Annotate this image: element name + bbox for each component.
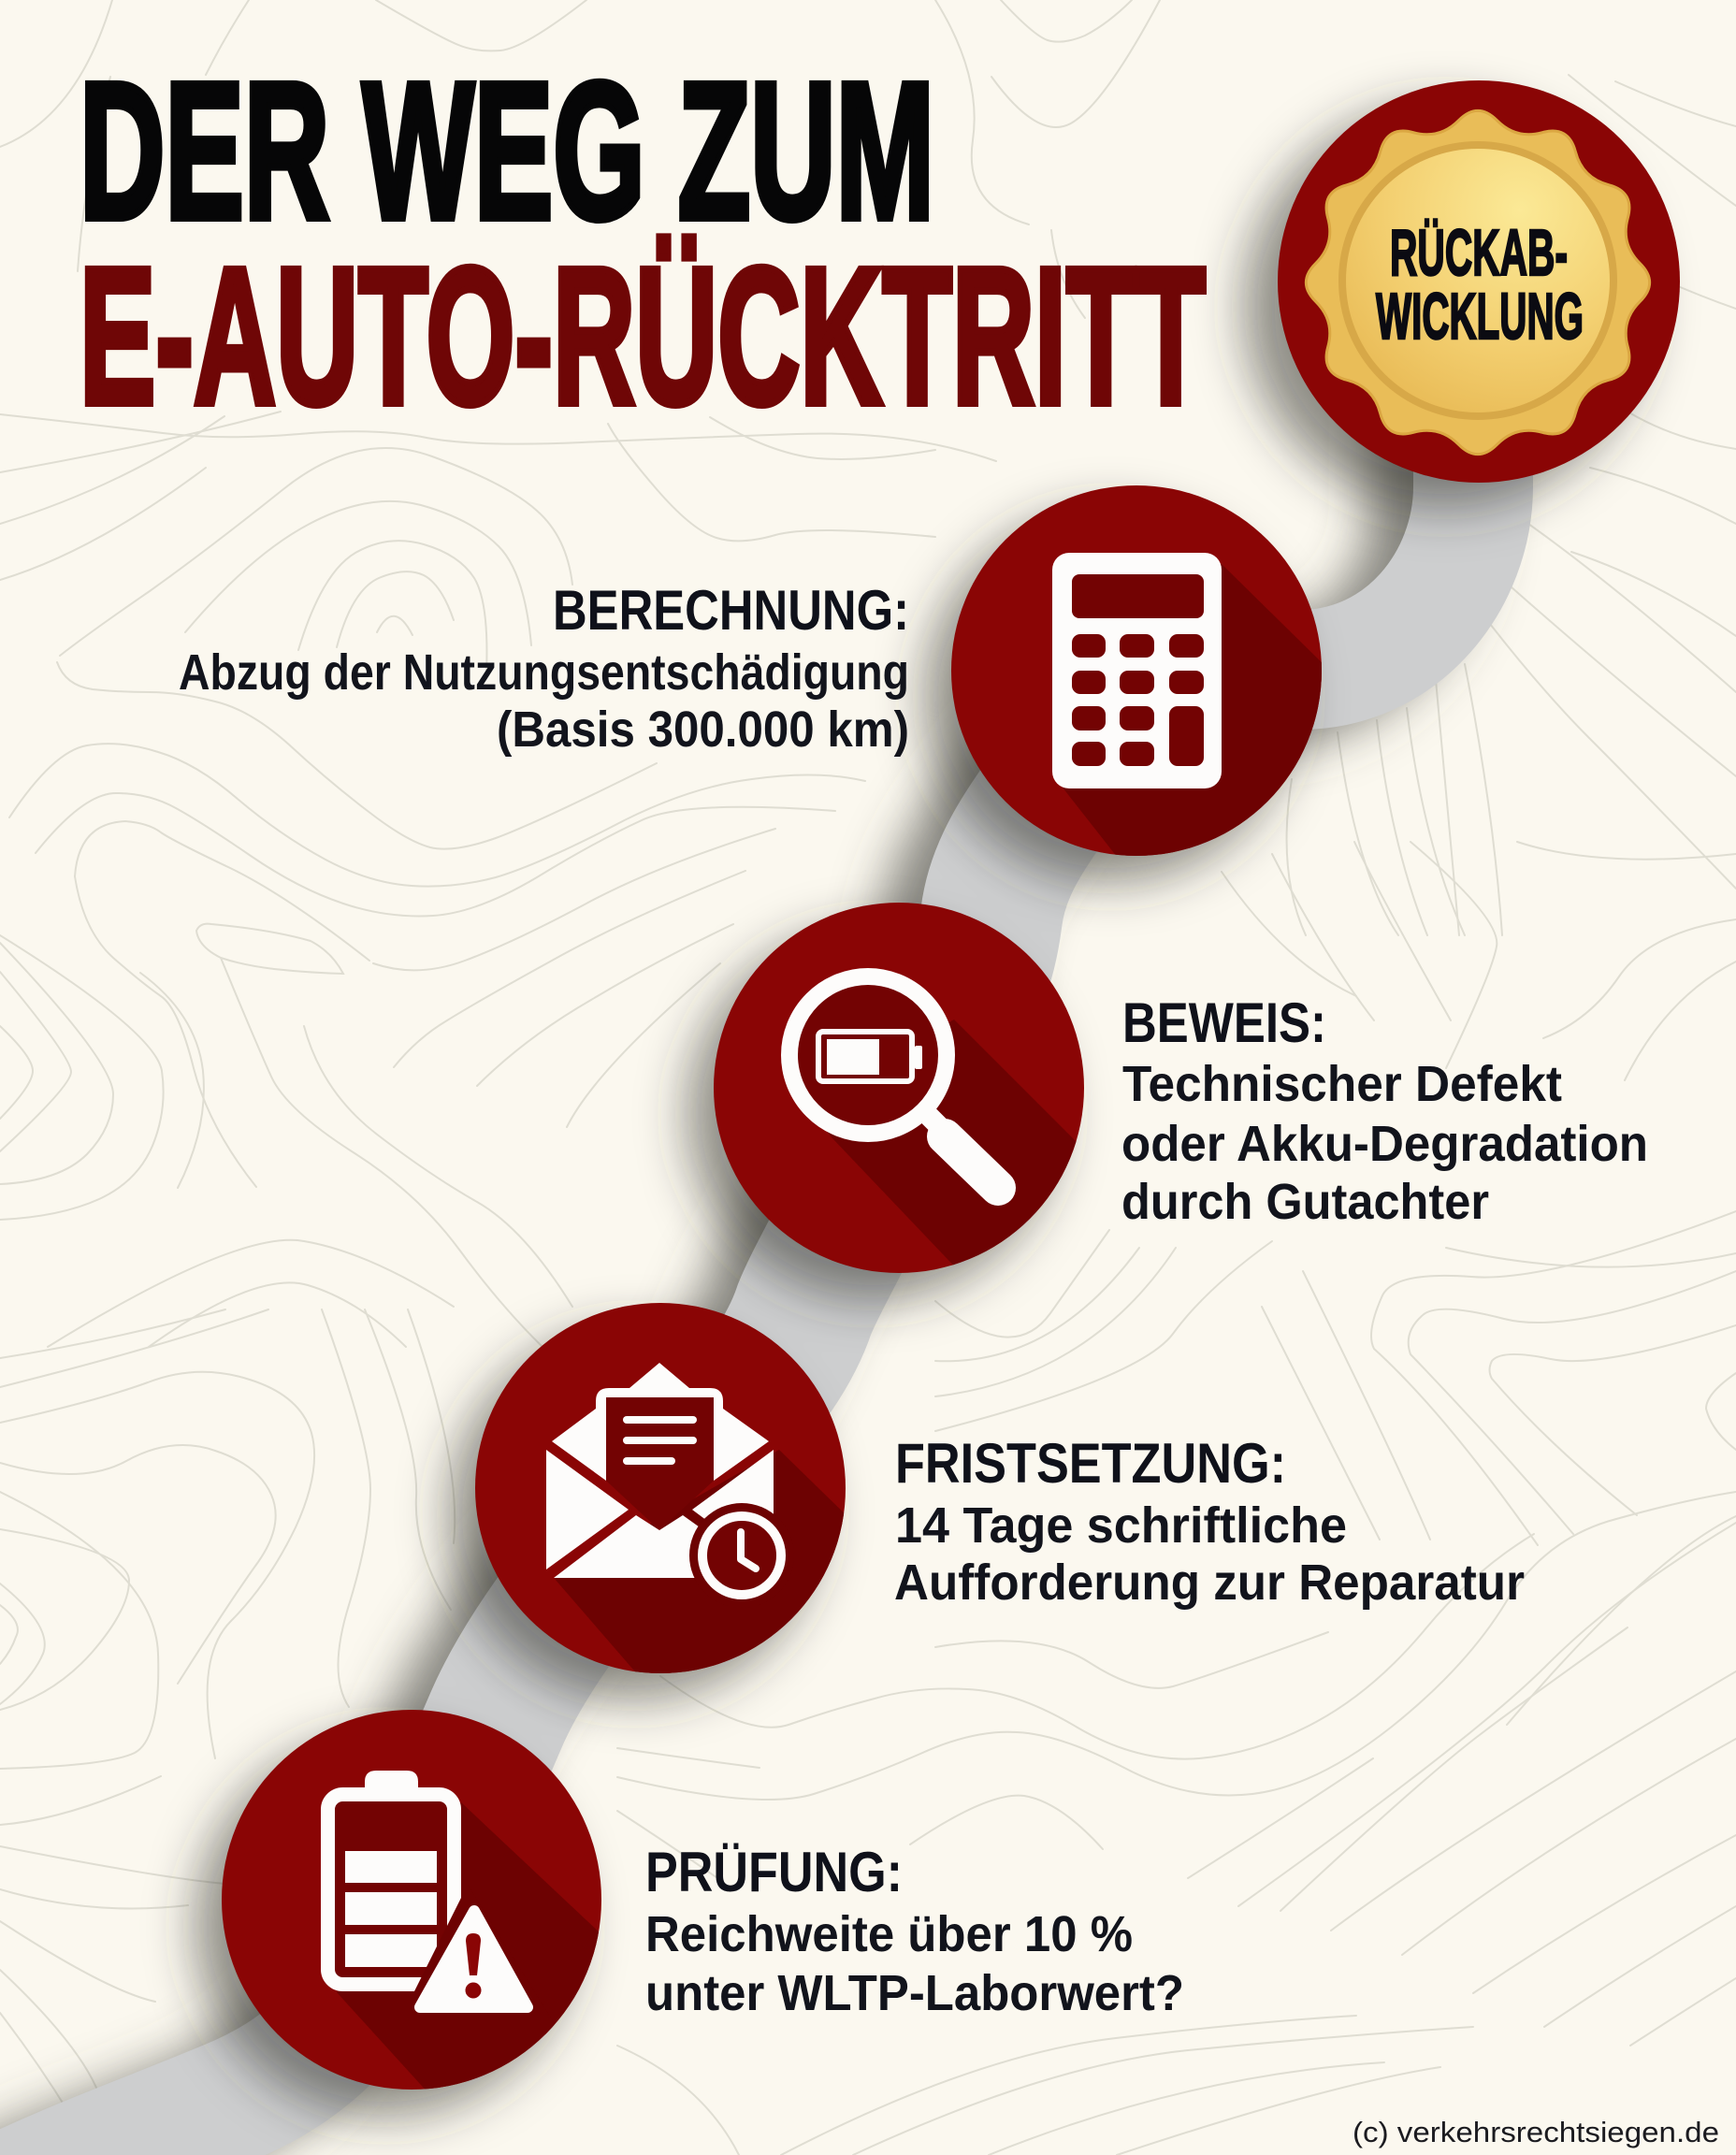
- icon circle: magnifier with battery: [714, 903, 1084, 1273]
- step text: Beweis: oder Akku-Degradation: [1121, 1116, 1648, 1172]
- road: winding path connecting the steps: [0, 393, 1473, 2155]
- step text: Prüfung: unter WLTP-Laborwert?: [645, 1965, 1184, 2021]
- step text: Prüfung: Reichweite über 10 %: [645, 1906, 1133, 1962]
- circle shadows: [195, 106, 1646, 2116]
- icon circle: battery with warning: [222, 1710, 603, 2095]
- title line 1: DER WEG ZUM: [80, 43, 934, 260]
- step text: Fristsetzung: 14 Tage schriftliche: [895, 1497, 1347, 1554]
- badge: gold seal Rückabwicklung: [1278, 80, 1680, 483]
- step text: Berechnung: (Basis 300.000 km): [497, 701, 909, 758]
- step text: Berechnung: BERECHNUNG:: [553, 579, 909, 642]
- step text: Beweis: BEWEIS:: [1122, 991, 1326, 1054]
- step text: Beweis: Technischer Defekt: [1122, 1056, 1562, 1112]
- step text: Beweis: durch Gutachter: [1121, 1174, 1489, 1230]
- badge: gold seal Rückabwicklung: RÜCKAB-: [1390, 216, 1568, 289]
- title: [80, 43, 1206, 445]
- step text: Fristsetzung: FRISTSETZUNG:: [895, 1432, 1286, 1495]
- road shadow: [0, 412, 1430, 2155]
- badge: gold seal Rückabwicklung: WICKLUNG: [1376, 280, 1584, 353]
- step text: Fristsetzung: [894, 1432, 1525, 1611]
- step text: Beweis: [1121, 991, 1648, 1230]
- icon circle: envelope with clock: [475, 1303, 856, 1684]
- copyright: (c) verkehrsrechtsiegen.de: [1353, 2116, 1719, 2148]
- step text: Fristsetzung: Aufforderung zur Reparatur: [894, 1555, 1525, 1611]
- icon circle: calculator: [951, 485, 1322, 856]
- step text: Prüfung: PRÜFUNG:: [645, 1841, 903, 1903]
- step text: Berechnung: Abzug der Nutzungsentschädigung: [179, 644, 909, 701]
- step text: Prüfung: [645, 1841, 1184, 2021]
- step text: Berechnung: [179, 579, 909, 758]
